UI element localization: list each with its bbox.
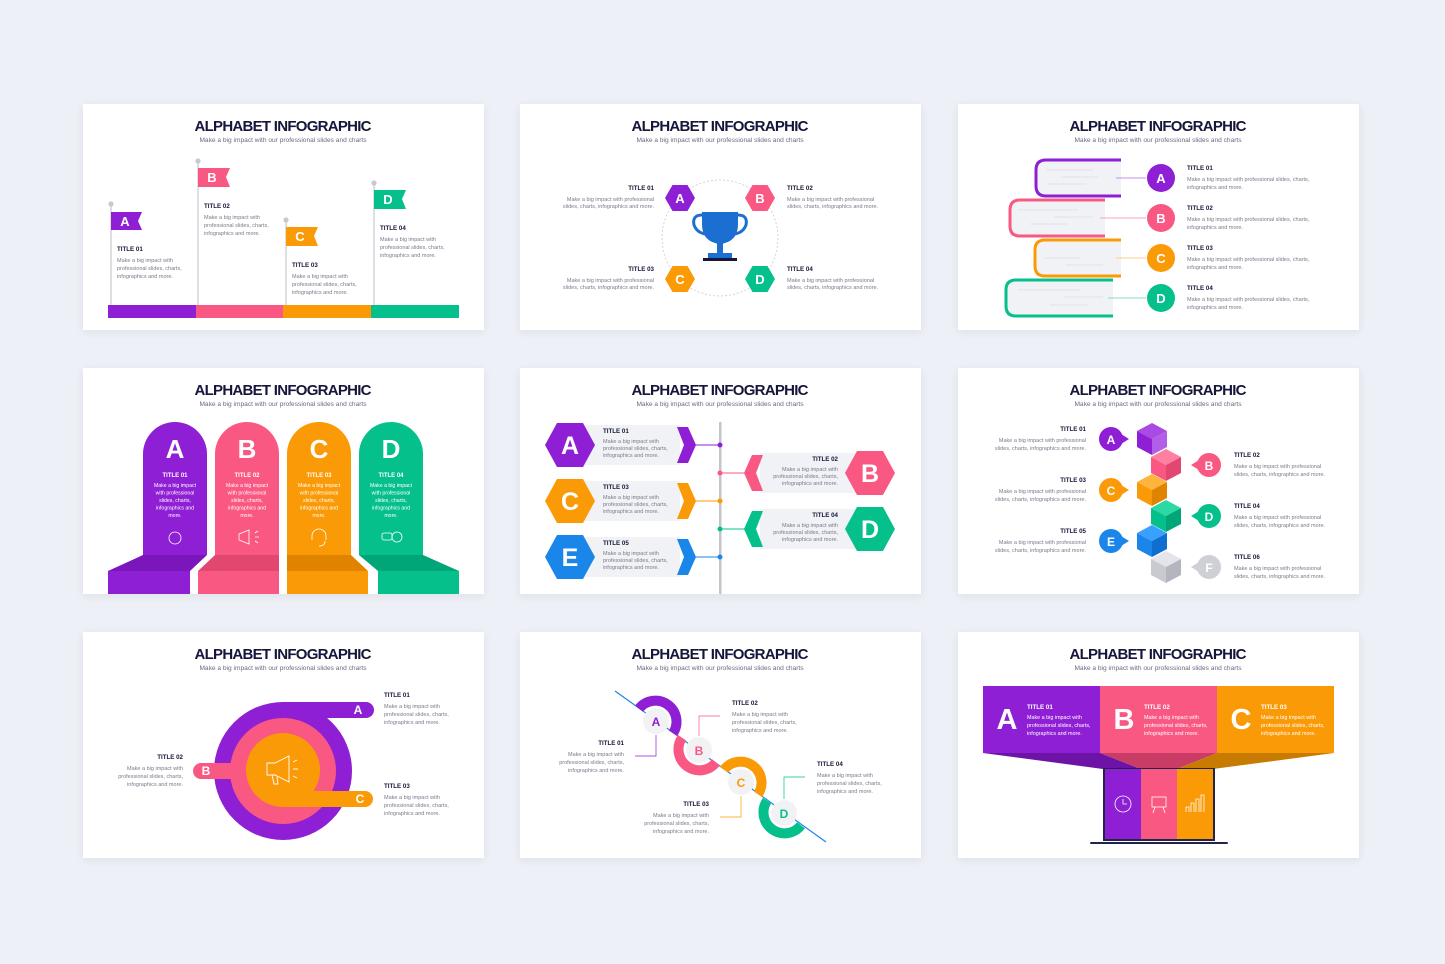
text: title 01: professional slides, charts, [559, 760, 624, 766]
circle C [1147, 244, 1175, 272]
item E: infographics and more. [603, 565, 659, 571]
text: title 01: TITLE 01 [598, 740, 625, 747]
item A: Make a big impact with [603, 439, 659, 445]
text: title 03: slides, charts, infographics and more. [995, 497, 1086, 503]
column C: more. [312, 513, 326, 519]
column A: with professional [156, 490, 194, 496]
book C [1035, 240, 1146, 276]
text: title 01: infographics and more. [1187, 185, 1243, 191]
text: title 01 [117, 246, 182, 280]
panel A: professional slides, charts, [1027, 723, 1091, 729]
text: title 03 [644, 801, 710, 835]
column B: slides, charts, [231, 498, 263, 504]
bubble F: F [1205, 561, 1213, 575]
item B: TITLE 02 [812, 456, 839, 463]
item B [718, 451, 895, 495]
text: title 04 [380, 225, 445, 259]
item E [545, 535, 722, 579]
text: title 01 [995, 426, 1087, 452]
text: title 03: slides, charts, infographics and more. [563, 285, 654, 291]
panel C: infographics and more. [1261, 731, 1316, 737]
column A [108, 422, 207, 594]
text: title 04: Make a big impact with professional slides, charts, [1187, 297, 1310, 303]
text: title 02: Make a big impact with professional [787, 197, 874, 203]
column A: TITLE 01 [162, 473, 188, 479]
panel C: C [1231, 704, 1252, 736]
ring B [678, 716, 720, 770]
book A [1036, 160, 1146, 196]
column C [287, 422, 368, 594]
item B: Make a big impact with [782, 467, 838, 473]
item A: TITLE 01 [603, 428, 629, 435]
text: title 05 [995, 528, 1087, 554]
circle A: A [1156, 171, 1166, 186]
text: title 01: professional slides, charts, [117, 266, 182, 272]
panel A: infographics and more. [1027, 731, 1082, 737]
text: title 01: infographics and more. [117, 274, 173, 280]
text: title 03 [292, 262, 357, 296]
cubes stack [1137, 423, 1181, 583]
text: title 02: TITLE 02 [787, 185, 813, 192]
panel B: TITLE 02 [1144, 704, 1170, 711]
flag D [371, 180, 406, 305]
text: title 05: Make a big impact with professional [999, 540, 1086, 546]
text: title 02 [1187, 205, 1310, 231]
column A: more. [168, 513, 182, 519]
text: title 04: Make a big impact with [817, 773, 873, 779]
flag C [283, 217, 318, 305]
panel: slide 1 flags: ALPHABET INFOGRAPHIC [194, 118, 372, 135]
column C: slides, charts, [303, 498, 335, 504]
text: title 02: professional slides, charts, [204, 223, 269, 229]
text: title 03: Make a big impact with [384, 795, 440, 801]
text: title 01 [1187, 165, 1310, 191]
text: title 04 [817, 761, 882, 795]
text: title 01: professional slides, charts, [384, 712, 449, 718]
panel: slide 6 cubes [958, 368, 1359, 594]
text: title 01: infographics and more. [568, 768, 624, 774]
flag A [108, 201, 142, 305]
text: title 03: Make a big impact with professional [567, 278, 654, 284]
item D: infographics and more. [782, 537, 838, 543]
panel: slide 4 arches: Make a big impact with our professional slides and charts [199, 401, 367, 408]
text: title 02: TITLE 02 [157, 754, 184, 761]
text: title 03: TITLE 03 [292, 262, 318, 269]
circles [193, 702, 374, 840]
text: title 03 [384, 783, 449, 817]
circle B [1147, 204, 1175, 232]
text: title 04: infographics and more. [817, 789, 873, 795]
monitor [1090, 768, 1228, 844]
text: title 03: professional slides, charts, [384, 803, 449, 809]
circle D [1147, 284, 1175, 312]
text: title 03: Make a big impact with professional slides, charts, [1187, 257, 1310, 263]
column C: C [310, 434, 329, 464]
bubble E [1099, 529, 1129, 553]
hex A [665, 185, 695, 211]
text: title 02: TITLE 02 [204, 203, 230, 210]
text: title 02: TITLE 02 [1187, 205, 1213, 212]
text: title 01 [563, 185, 655, 210]
text: title 02: slides, charts, infographics and more. [1234, 472, 1326, 478]
hex B [745, 185, 775, 211]
panel: slide 8 diagonal rings: ALPHABET INFOGRAPHIC [632, 646, 809, 663]
text: title 01: slides, charts, infographics and more. [995, 446, 1086, 452]
panel C [1217, 686, 1334, 753]
bubble F [1191, 555, 1221, 579]
panel B: infographics and more. [1144, 731, 1199, 737]
text: title 03: TITLE 03 [683, 801, 710, 808]
text: title 03: TITLE 03 [384, 783, 410, 790]
text: title 02: infographics and more. [127, 782, 183, 788]
column D [359, 422, 459, 594]
text: title 06: Make a big impact with professional [1234, 566, 1321, 572]
item E: E [562, 544, 578, 572]
panel: slide 7 spiral circle: ALPHABET INFOGRAPHIC [194, 646, 372, 663]
text: title 06: slides, charts, infographics and more. [1234, 574, 1326, 580]
column B: B [238, 434, 256, 464]
item A: A [561, 432, 579, 460]
panel: slide 9 funnel monitor [958, 632, 1359, 858]
item D [718, 507, 895, 551]
text: title 02 [1234, 452, 1326, 478]
panel: slide 6 cubes: ALPHABET INFOGRAPHIC [1070, 382, 1247, 399]
text: title 03: infographics and more. [1187, 265, 1243, 271]
text: title 02: slides, charts, infographics and more. [787, 204, 879, 210]
item D: D [861, 516, 879, 544]
panel: slide 1 flags [83, 104, 484, 330]
circle B: B [1156, 211, 1166, 226]
panel B: Make a big impact with [1144, 715, 1199, 721]
flag A: A [120, 214, 130, 229]
item D: professional slides, charts, [773, 530, 838, 536]
text: title 03 [1187, 245, 1310, 271]
hex A: A [675, 191, 685, 206]
panel A [983, 686, 1100, 753]
panel: slide 7 spiral circle [83, 632, 484, 858]
bubble B: B [1205, 459, 1214, 473]
flag D: D [383, 192, 393, 207]
item E: professional slides, charts, [603, 558, 668, 564]
text: title 01: Make a big impact with professional slides, charts, [1187, 177, 1310, 183]
column D: with professional [372, 490, 410, 496]
item B: professional slides, charts, [773, 474, 838, 480]
text: title 02 [204, 203, 269, 237]
text: title 02: Make a big impact with [127, 766, 183, 772]
circle C: C [1156, 251, 1166, 266]
text: title 04 [1187, 285, 1310, 311]
text: title 02: professional slides, charts, [732, 720, 797, 726]
panel A: Make a big impact with [1027, 715, 1082, 721]
hex B: B [755, 191, 765, 206]
item E: Make a big impact with [603, 551, 659, 557]
panel B [1100, 686, 1217, 753]
panel C: professional slides, charts, [1261, 723, 1325, 729]
column A: infographics and [156, 506, 194, 512]
column D: slides, charts, [375, 498, 407, 504]
panel: slide 5 hexagon timeline: Make a big impact with our professional slides and charts [636, 401, 804, 408]
item A: professional slides, charts, [603, 446, 668, 452]
flag B [195, 158, 230, 305]
bubble D [1191, 504, 1221, 528]
item C: infographics and more. [603, 509, 659, 515]
column D: more. [384, 513, 398, 519]
book B [1010, 200, 1146, 236]
flag B: B [207, 170, 217, 185]
text: title 04: professional slides, charts, [817, 781, 882, 787]
text: title 01: slides, charts, infographics and more. [563, 204, 654, 210]
hex D [745, 266, 775, 292]
text: title 02 [787, 185, 879, 210]
panel: slide 4 arches [83, 368, 484, 594]
panel: slide 3 books: Make a big impact with our professional slides and charts [1074, 137, 1242, 144]
item A [545, 423, 722, 467]
funnel [983, 753, 1334, 769]
column C: with professional [300, 490, 338, 496]
column C: Make a big impact [298, 483, 341, 489]
text: title 04: infographics and more. [380, 253, 436, 259]
panel C: TITLE 03 [1261, 704, 1287, 711]
text: title 03 [563, 266, 655, 291]
bubble A [1099, 427, 1129, 451]
text: title 04: Make a big impact with [380, 237, 436, 243]
circles: C [356, 792, 365, 806]
item B: infographics and more. [782, 481, 838, 487]
text: title 01: Make a big impact with [384, 704, 440, 710]
text: title 02: Make a big impact with professional [1234, 464, 1321, 470]
item C: C [561, 488, 579, 516]
text: title 02: TITLE 02 [732, 700, 758, 707]
panel: slide 6 cubes: Make a big impact with our professional slides and charts [1074, 401, 1242, 408]
ring D [763, 777, 805, 833]
column B: infographics and [228, 506, 266, 512]
text: title 03: Make a big impact with [292, 274, 348, 280]
item A: infographics and more. [603, 453, 659, 459]
panel: slide 9 funnel monitor: ALPHABET INFOGRAPHIC [1070, 646, 1247, 663]
ring D: D [780, 807, 789, 821]
text: title 04: infographics and more. [1187, 305, 1243, 311]
text: title 01 [559, 740, 625, 774]
text: title 04: Make a big impact with professional [787, 278, 874, 284]
text: title 03: Make a big impact with professional [999, 489, 1086, 495]
panel B: B [1114, 704, 1134, 736]
text: title 01: TITLE 01 [1187, 165, 1213, 172]
text: title 04: TITLE 04 [1234, 503, 1260, 510]
text: title 02: professional slides, charts, [118, 774, 183, 780]
panel: slide 7 spiral circle: Make a big impact with our professional slides and charts [199, 665, 367, 672]
item C: Make a big impact with [603, 495, 659, 501]
column C: TITLE 03 [306, 473, 332, 479]
text: title 05: slides, charts, infographics and more. [995, 548, 1086, 554]
panel: slide 3 books [958, 104, 1359, 330]
panel A: A [997, 704, 1018, 736]
text: title 03: Make a big impact with [653, 813, 709, 819]
text: title 04: TITLE 04 [817, 761, 843, 768]
text: title 04: slides, charts, infographics and more. [787, 285, 879, 291]
text: title 03: TITLE 03 [628, 266, 655, 273]
hex C: C [675, 272, 685, 287]
text: title 02: TITLE 02 [1234, 452, 1260, 459]
text: title 02: infographics and more. [204, 231, 260, 237]
book D [1006, 280, 1146, 316]
panel: slide 2 trophy: Make a big impact with our professional slides and charts [636, 137, 804, 144]
item C: professional slides, charts, [603, 502, 668, 508]
panel: slide 4 arches: ALPHABET INFOGRAPHIC [194, 382, 372, 399]
column B [198, 422, 279, 594]
text: title 04: TITLE 04 [787, 266, 813, 273]
text: title 02 [118, 754, 184, 788]
ring B: B [695, 744, 704, 758]
item B: B [861, 460, 879, 488]
text: title 03: professional slides, charts, [292, 282, 357, 288]
column B: TITLE 02 [234, 473, 260, 479]
text: title 01 [384, 692, 449, 726]
text: title 04: professional slides, charts, [380, 245, 445, 251]
panel C: Make a big impact with [1261, 715, 1316, 721]
flag C: C [295, 229, 305, 244]
panel: slide 8 diagonal rings [520, 632, 921, 858]
panel: slide 2 trophy: ALPHABET INFOGRAPHIC [632, 118, 809, 135]
text: title 03: infographics and more. [384, 811, 440, 817]
bubble E: E [1107, 535, 1115, 549]
panel: slide 9 funnel monitor: Make a big impact with our professional slides and charts [1074, 665, 1242, 672]
column D: TITLE 04 [378, 473, 404, 479]
text: title 01: TITLE 01 [117, 246, 143, 253]
text: title 01: TITLE 01 [1060, 426, 1087, 433]
text: title 03: infographics and more. [292, 290, 348, 296]
text: title 02: Make a big impact with [732, 712, 788, 718]
panel B: professional slides, charts, [1144, 723, 1208, 729]
circles: B [202, 764, 211, 778]
text: title 01: Make a big impact with professional [999, 438, 1086, 444]
item E: TITLE 05 [603, 540, 629, 547]
text: title 04: Make a big impact with professional [1234, 515, 1321, 521]
hex D: D [755, 272, 765, 287]
bubble C [1099, 478, 1129, 502]
text: title 04: slides, charts, infographics and more. [1234, 523, 1326, 529]
column D: Make a big impact [370, 483, 413, 489]
text: title 04: TITLE 04 [380, 225, 406, 232]
column C: infographics and [300, 506, 338, 512]
text: title 06 [1234, 554, 1326, 580]
text: title 04 [787, 266, 879, 291]
ring C [720, 762, 762, 817]
bubble C: C [1107, 484, 1116, 498]
text: title 02: Make a big impact with [204, 215, 260, 221]
text: title 03: infographics and more. [653, 829, 709, 835]
panel: slide 5 hexagon timeline [520, 368, 921, 594]
column B: Make a big impact [226, 483, 269, 489]
column A: Make a big impact [154, 483, 197, 489]
panel A: TITLE 01 [1027, 704, 1053, 711]
column D: D [382, 434, 400, 464]
panel: slide 5 hexagon timeline: ALPHABET INFOGRAPHIC [632, 382, 809, 399]
hex C [665, 266, 695, 292]
text: title 01: Make a big impact with [568, 752, 624, 758]
text: title 02: infographics and more. [732, 728, 788, 734]
item D: Make a big impact with [782, 523, 838, 529]
column A: A [166, 434, 185, 464]
text: title 01: Make a big impact with [117, 258, 173, 264]
text: title 06: TITLE 06 [1234, 554, 1260, 561]
text: title 02: infographics and more. [1187, 225, 1243, 231]
circles: A [354, 703, 363, 717]
text: title 03: professional slides, charts, [644, 821, 709, 827]
text: title 04: TITLE 04 [1187, 285, 1213, 292]
circle A [1147, 164, 1175, 192]
item C: TITLE 03 [603, 484, 629, 491]
ring A [635, 701, 677, 756]
circle D: D [1156, 291, 1166, 306]
ring C: C [737, 776, 746, 790]
bubble D: D [1205, 510, 1214, 524]
item C [545, 479, 722, 523]
bubble A: A [1107, 433, 1116, 447]
column D: infographics and [372, 506, 410, 512]
text: title 02 [732, 700, 797, 734]
panel: slide 3 books: ALPHABET INFOGRAPHIC [1070, 118, 1247, 135]
column A: slides, charts, [159, 498, 191, 504]
text: title 01: TITLE 01 [384, 692, 410, 699]
text: title 04 [1234, 503, 1326, 529]
panel: slide 8 diagonal rings: Make a big impact with our professional slides and charts [636, 665, 804, 672]
text: title 02: Make a big impact with professional slides, charts, [1187, 217, 1310, 223]
text: title 05: TITLE 05 [1060, 528, 1087, 535]
text: title 01: Make a big impact with professional [567, 197, 654, 203]
color bar [108, 305, 459, 318]
text: title 03: TITLE 03 [1060, 477, 1087, 484]
icon: trophy [694, 212, 746, 261]
text: title 01: infographics and more. [384, 720, 440, 726]
panel: slide 2 trophy [520, 104, 921, 330]
panel: slide 1 flags: Make a big impact with our professional slides and charts [199, 137, 367, 144]
column B: with professional [228, 490, 266, 496]
text: title 01: TITLE 01 [628, 185, 655, 192]
item D: TITLE 04 [812, 512, 839, 519]
column B: more. [240, 513, 254, 519]
text: title 03 [995, 477, 1087, 503]
bubble B [1191, 453, 1221, 477]
text: title 03: TITLE 03 [1187, 245, 1213, 252]
ring A: A [652, 715, 661, 729]
icon: megaphone [267, 756, 298, 784]
